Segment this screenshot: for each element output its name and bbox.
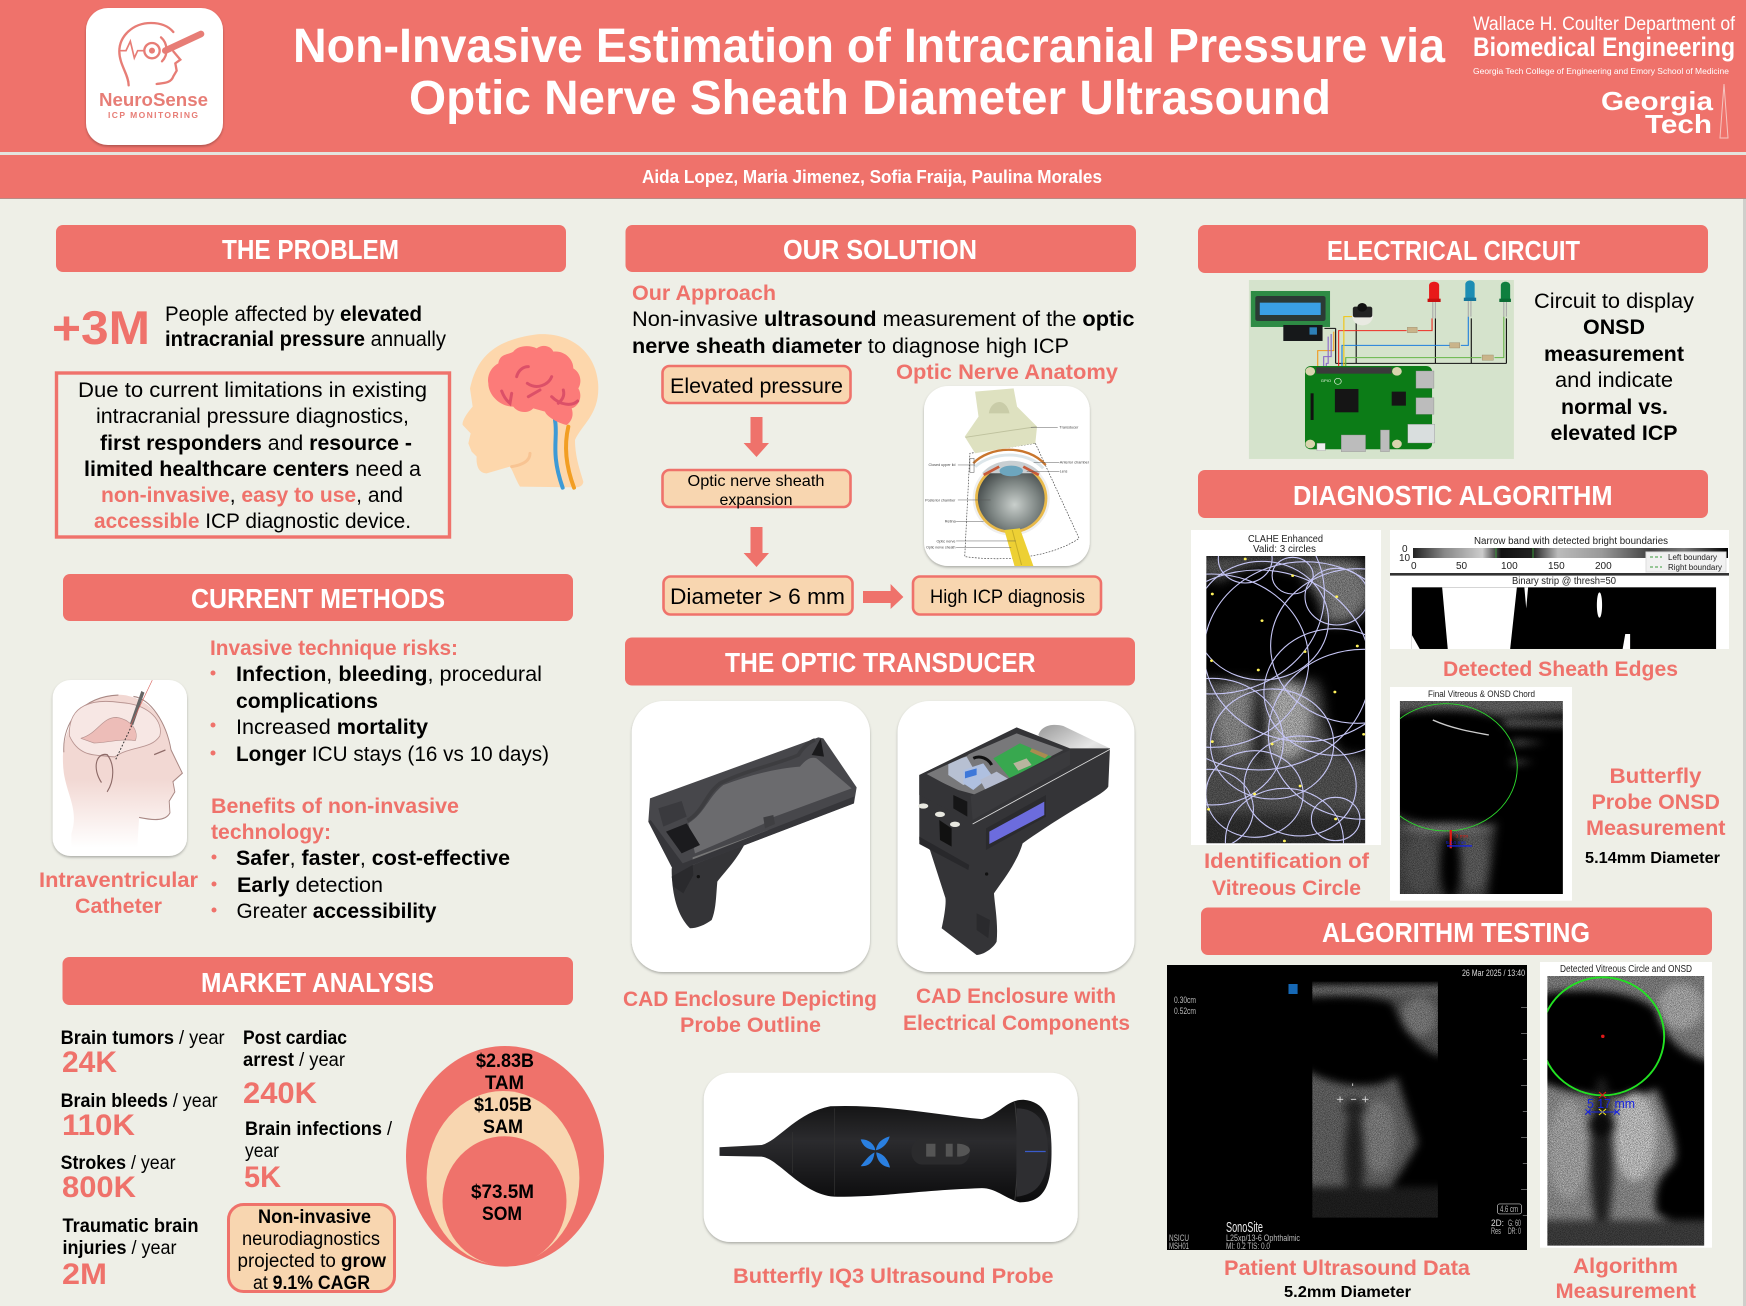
text block: circuit description: measurement [1544, 343, 1684, 366]
stat: brain tumors: Brain tumors / year [61, 1028, 225, 1049]
panel: algorithm testing [1167, 908, 1725, 1303]
caption: algorithm measurement [1556, 1255, 1696, 1303]
callout box: problem statement: accessible ICP diagnostic device. [94, 510, 411, 533]
flow box: optic nerve sheath expansion: expansion [720, 492, 792, 509]
header banner [0, 0, 1746, 199]
chart: TAM SAM SOM nested circles: $2.83B [476, 1051, 534, 1072]
text block: benefits of non-invasive technology [211, 795, 510, 923]
logo: NeuroSense [86, 8, 223, 145]
text block: our approach: Non-invasive ultrasound measurement of the optic [632, 308, 1135, 331]
heading: the optic transducer [625, 638, 1135, 686]
authors: Aida Lopez, Maria Jimenez, Sofia Fraija, Paulina Morales [642, 167, 1102, 187]
chart: narrow band with detected boundaries and binary strip: 100 [1501, 561, 1518, 572]
flow box: diameter greater than 6 mm: Diameter > 6 mm [670, 584, 845, 609]
text block: our approach: Our Approach [632, 282, 776, 305]
image: patient ultrasound scan [1167, 962, 1527, 1251]
stat: strokes: Strokes / year [61, 1153, 176, 1174]
image: patient ultrasound scan: SonoSite [1226, 1219, 1263, 1236]
caption: patient ultrasound data: Patient Ultrasound Data [1224, 1257, 1470, 1280]
caption: patient ultrasound data [1224, 1257, 1470, 1301]
text block: benefits of non-invasive technology: Benefits of non-invasive [211, 795, 459, 818]
panel: the optic transducer [623, 638, 1135, 1288]
diagram: Raspberry Pi circuit [1249, 280, 1514, 459]
caption: CAD enclosure with electrical components: CAD Enclosure with [916, 985, 1116, 1008]
text block: invasive technique risks: Infection, bleeding, procedural [236, 663, 542, 686]
stat description: intracranial pressure annually [165, 328, 446, 351]
callout box: problem statement: intracranial pressure diagnostics, [96, 405, 409, 428]
stat: traumatic brain injuries: injuries / year [62, 1238, 177, 1259]
stat: post cardiac arrest [243, 1028, 347, 1110]
stat: post cardiac arrest: Post cardiac [243, 1028, 347, 1049]
chart: TAM SAM SOM nested circles [406, 1046, 604, 1267]
callout box: problem statement: limited healthcare centers need a [84, 458, 421, 481]
chart: narrow band with detected boundaries and binary strip: Right boundary [1668, 563, 1722, 572]
stat: +3M: +3M [52, 301, 150, 354]
heading: current methods [63, 574, 573, 621]
arrow: right [863, 584, 903, 609]
heading: the problem [56, 225, 566, 272]
flow box: optic nerve sheath expansion: Optic nerve sheath [688, 473, 824, 490]
text block: benefits of non-invasive technology: Greater accessibility [236, 900, 437, 923]
callout box: problem statement: Due to current limitations in existing [78, 379, 427, 402]
caption: butterfly probe ONSD measurement [1585, 765, 1726, 867]
image: patient ultrasound scan: 4.6 cm [1500, 1204, 1518, 1214]
title: Non-Invasive Estimation of Intracranial Pressure via [293, 20, 1445, 73]
caption: identification of vitreous circle: Identification of [1204, 850, 1370, 873]
chart: narrow band with detected boundaries and binary strip: Binary strip @ thresh=50 [1512, 576, 1616, 587]
image: final vitreous and ONSD chord: Final Vitreous & ONSD Chord [1428, 689, 1535, 699]
stat: traumatic brain injuries: Traumatic brain [62, 1216, 198, 1237]
panel: diagnostic algorithm [1191, 470, 1729, 901]
image: CLAHE vitreous circle detection: Valid: 3 circles [1253, 544, 1316, 555]
stat: brain infections [244, 1119, 393, 1194]
stat: traumatic brain injuries [62, 1216, 198, 1291]
stat: strokes [61, 1153, 176, 1204]
panel: the problem [52, 225, 598, 537]
stat: brain bleeds [61, 1091, 218, 1142]
caption: Butterfly IQ3 ultrasound probe: Butterfly IQ3 Ultrasound Probe [733, 1265, 1054, 1288]
caption: CAD enclosure depicting probe outline [623, 988, 877, 1037]
image: patient ultrasound scan: L25xp/13-6 Ophthalmic [1226, 1233, 1300, 1243]
logo: NeuroSense: NeuroSense [99, 90, 208, 110]
heading: the optic transducer: THE OPTIC TRANSDUCER [725, 647, 1036, 678]
callout: market growth: projected to grow [238, 1251, 386, 1272]
image: final vitreous and ONSD chord: 3 mm [1455, 834, 1468, 839]
image: patient ultrasound scan: G: 60 [1508, 1218, 1521, 1228]
text block: invasive technique risks: complications [236, 690, 378, 713]
logo: NeuroSense: ICP MONITORING [108, 110, 198, 120]
heading: diagnostic algorithm: DIAGNOSTIC ALGORITHM [1293, 480, 1612, 511]
panel: current methods [39, 574, 573, 923]
chart: TAM SAM SOM nested circles: $1.05B [474, 1095, 532, 1116]
caption: detected sheath edges: Detected Sheath Edges [1443, 658, 1678, 681]
flow box: elevated pressure: Elevated pressure [670, 375, 843, 398]
image: CLAHE vitreous circle detection [1191, 530, 1381, 845]
image: optic nerve anatomy diagram: Retina [945, 519, 956, 524]
stat: brain tumors: 24K [62, 1046, 117, 1079]
icon: head with brain [463, 334, 598, 488]
stat description: People affected by elevated [165, 303, 422, 326]
caption: intraventricular catheter: Intraventricular [39, 869, 198, 892]
text block: circuit description [1534, 290, 1695, 445]
text block: invasive technique risks: Longer ICU stays (16 vs 10 days) [236, 743, 549, 766]
image: patient ultrasound scan: Res [1491, 1226, 1501, 1236]
image: patient ultrasound scan: 0.52cm [1174, 1006, 1196, 1016]
callout: market growth: Non-invasive [258, 1207, 371, 1228]
image: optic nerve anatomy diagram: Anterior chamber [1060, 460, 1090, 465]
stat: brain bleeds: 110K [62, 1109, 135, 1142]
department logo text [1473, 14, 1736, 76]
Georgia Tech logo [1601, 84, 1728, 139]
caption: algorithm measurement: Measurement [1556, 1280, 1696, 1303]
chart: narrow band with detected boundaries and binary strip: 200 [1595, 561, 1612, 572]
text block: circuit description: and indicate [1555, 369, 1673, 392]
image: CAD enclosure with electrical components [898, 701, 1134, 972]
Georgia Tech logo: Tech [1645, 109, 1712, 139]
text block: circuit description: Circuit to display [1534, 290, 1695, 313]
department logo text: Georgia Tech College of Engineering and Emory School of Medicine [1473, 66, 1729, 76]
chart: TAM SAM SOM nested circles: $73.5M [471, 1182, 534, 1203]
caption: identification of vitreous circle [1204, 850, 1370, 900]
image: detected vitreous circle and ONSD: 5 17 mm [1587, 1096, 1635, 1111]
image: final vitreous and ONSD chord [1390, 687, 1572, 901]
callout: market growth: neurodiagnostics [242, 1229, 380, 1250]
heading: market analysis: MARKET ANALYSIS [201, 967, 434, 998]
heading: electrical circuit [1198, 225, 1708, 273]
panel: our solution [626, 225, 1136, 614]
callout: market growth: at 9.1% CAGR [253, 1273, 370, 1294]
flow box: elevated pressure [662, 366, 850, 403]
caption: CAD enclosure depicting probe outline: CAD Enclosure Depicting [623, 988, 877, 1011]
text block: our approach: nerve sheath diameter to diagnose high ICP [632, 335, 1069, 358]
chart: narrow band with detected boundaries and binary strip: Narrow band with detected bright boundaries [1474, 536, 1668, 547]
heading: the problem: THE PROBLEM [222, 234, 399, 265]
heading: our solution: OUR SOLUTION [783, 234, 977, 265]
image: optic nerve anatomy diagram: Closed upper lid [929, 462, 955, 467]
stat: brain bleeds: Brain bleeds / year [61, 1091, 218, 1112]
chart: TAM SAM SOM nested circles: TAM [485, 1073, 524, 1094]
callout box: problem statement: first responders and resource - [100, 432, 412, 455]
title [293, 20, 1445, 125]
chart: narrow band with detected boundaries and binary strip [1390, 530, 1729, 649]
text block: circuit description: elevated ICP [1550, 422, 1678, 445]
caption: intraventricular catheter: Catheter [75, 895, 162, 918]
arrow: down 2 [744, 527, 769, 567]
image: patient ultrasound scan: 0.30cm [1174, 995, 1196, 1005]
stat: traumatic brain injuries: 2M [62, 1258, 107, 1291]
text block: benefits of non-invasive technology: Early detection [237, 874, 383, 897]
image: optic nerve anatomy diagram: Optic nerve [936, 538, 956, 543]
heading: algorithm testing [1201, 908, 1712, 955]
title: Optic Nerve Sheath Diameter Ultrasound [409, 72, 1331, 125]
image: detected vitreous circle and ONSD: Detected Vitreous Circle and ONSD [1560, 964, 1692, 975]
image: detected vitreous circle and ONSD [1540, 962, 1712, 1248]
stat: strokes: 800K [62, 1171, 136, 1204]
stat description [165, 303, 446, 351]
chart: narrow band with detected boundaries and binary strip: 150 [1548, 561, 1565, 572]
flow box: high ICP diagnosis: High ICP diagnosis [930, 587, 1085, 608]
chart: narrow band with detected boundaries and binary strip: 50 [1456, 561, 1468, 572]
caption: butterfly probe ONSD measurement: Probe ONSD [1592, 791, 1720, 814]
image: optic nerve anatomy diagram: Lens [1060, 469, 1067, 474]
image: optic nerve anatomy diagram: Optic nerve sheath [926, 545, 955, 550]
text block: benefits of non-invasive technology: Safer, faster, cost-effective [236, 847, 510, 870]
stat: brain infections: 5K [244, 1161, 281, 1194]
text block: invasive technique risks: Increased mortality [236, 716, 428, 739]
chart: narrow band with detected boundaries and binary strip: Left boundary [1668, 553, 1717, 562]
heading: current methods: CURRENT METHODS [191, 583, 445, 614]
stat: post cardiac arrest: 240K [243, 1077, 317, 1110]
image: CAD enclosure probe outline [632, 701, 870, 972]
flow box: high ICP diagnosis [913, 576, 1101, 614]
image: patient ultrasound scan: 26 Mar 2025 / 13:40 [1462, 968, 1525, 978]
caption: butterfly probe ONSD measurement: 5.14mm Diameter [1585, 850, 1720, 867]
callout: market growth [228, 1204, 394, 1294]
image: final vitreous and ONSD chord: 5.14 mm [1446, 840, 1466, 846]
caption: CAD enclosure depicting probe outline: Probe Outline [680, 1014, 821, 1037]
Georgia Tech logo: Georgia [1601, 86, 1714, 116]
chart: narrow band with detected boundaries and binary strip: 0 [1411, 561, 1417, 572]
panel: electrical circuit [1198, 225, 1708, 459]
stat: brain infections: Brain infections / [245, 1119, 393, 1140]
text block: circuit description: ONSD [1583, 316, 1645, 339]
image: patient ultrasound scan: NSICU [1169, 1233, 1189, 1243]
image: patient ultrasound scan: MSH01 [1169, 1241, 1189, 1251]
text block: invasive technique risks [210, 637, 549, 766]
caption: patient ultrasound data: 5.2mm Diameter [1284, 1284, 1411, 1301]
text block: benefits of non-invasive technology: technology: [211, 821, 331, 844]
caption: CAD enclosure with electrical components [903, 985, 1130, 1035]
heading: electrical circuit: ELECTRICAL CIRCUIT [1327, 235, 1580, 266]
image: patient ultrasound scan: DR: 0 [1508, 1226, 1521, 1236]
heading: diagnostic algorithm [1198, 470, 1708, 518]
text block: our approach [632, 282, 1135, 358]
image: optic nerve anatomy diagram: Posterior chamber [925, 497, 956, 502]
caption: identification of vitreous circle: Vitreous Circle [1212, 877, 1361, 900]
stat: post cardiac arrest: arrest / year [243, 1050, 346, 1071]
stat: brain tumors [61, 1028, 225, 1079]
arrow: down 1 [744, 417, 769, 457]
caption: butterfly probe ONSD measurement: Measurement [1586, 817, 1726, 840]
image: intraventricular catheter [53, 680, 187, 856]
flow box: diameter greater than 6 mm [664, 576, 852, 614]
chart: narrow band with detected boundaries and binary strip: 10 [1399, 553, 1411, 564]
text block: circuit description: normal vs. [1561, 396, 1668, 419]
heading: algorithm testing: ALGORITHM TESTING [1322, 917, 1590, 948]
text block: invasive technique risks: Invasive technique risks: [210, 637, 458, 660]
image: patient ultrasound scan: 2D: [1491, 1218, 1504, 1228]
caption: butterfly probe ONSD measurement: Butterfly [1610, 765, 1702, 788]
stat: brain infections: year [245, 1141, 280, 1162]
heading: our solution [626, 225, 1136, 272]
diagram: Raspberry Pi circuit: GPIO [1321, 378, 1332, 383]
image: Butterfly IQ3 ultrasound probe [704, 1073, 1078, 1242]
caption: intraventricular catheter [39, 869, 198, 918]
image: optic nerve anatomy diagram [924, 386, 1090, 567]
caption: algorithm measurement: Algorithm [1573, 1255, 1678, 1278]
image: CLAHE vitreous circle detection: CLAHE Enhanced [1248, 534, 1323, 545]
chart: narrow band with detected boundaries and binary strip: 0 [1402, 544, 1408, 555]
caption: CAD enclosure with electrical components: Electrical Components [903, 1012, 1130, 1035]
panel: market analysis [61, 957, 604, 1294]
flow box: optic nerve sheath expansion [662, 470, 850, 509]
image: optic nerve anatomy diagram: Transducer [1059, 425, 1079, 430]
chart: TAM SAM SOM nested circles: SAM [483, 1117, 523, 1138]
heading: market analysis [62, 957, 573, 1005]
callout box: problem statement [56, 373, 450, 537]
image: patient ultrasound scan: MI: 0.2 TIS: 0.0 [1226, 1241, 1270, 1251]
caption: optic nerve anatomy: Optic Nerve Anatomy [896, 361, 1118, 384]
chart: TAM SAM SOM nested circles: SOM [482, 1204, 522, 1225]
callout box: problem statement: non-invasive, easy to use, and [101, 484, 403, 507]
